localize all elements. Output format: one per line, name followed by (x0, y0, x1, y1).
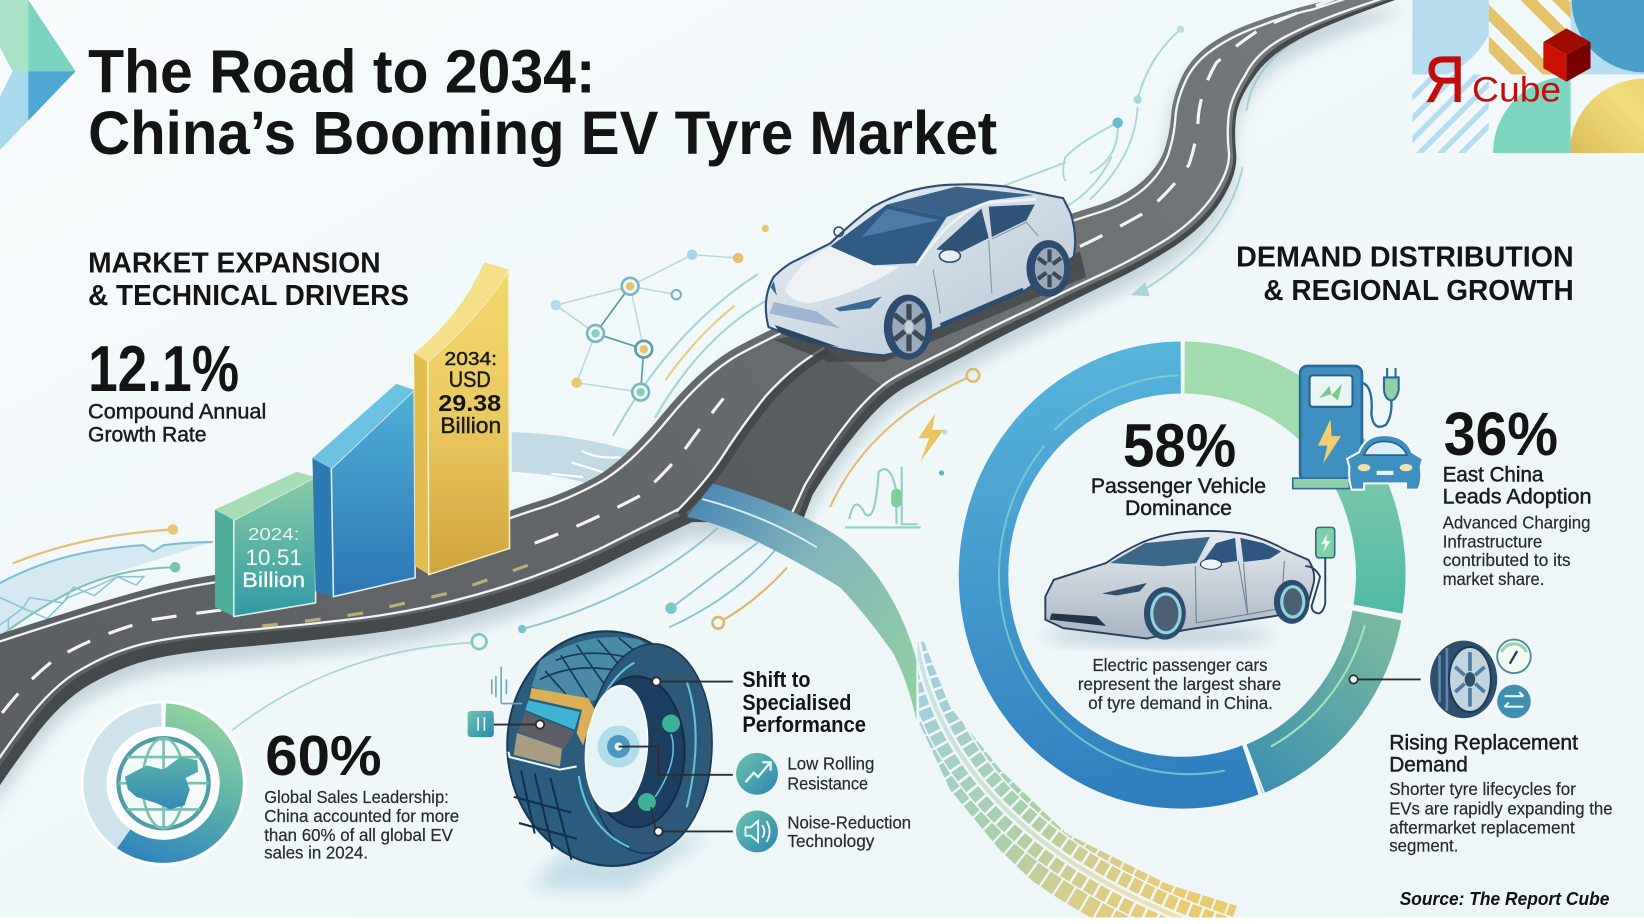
title: The Road to 2034: (88, 37, 596, 105)
feature: noise reduction technology: Noise-Reduction (787, 812, 911, 832)
icon: lightning and plug sketch (845, 413, 944, 527)
flow lines and network nodes (0, 26, 1308, 730)
pale circuit band at left (0, 542, 212, 636)
source credit: Source: The Report Cube (1400, 888, 1609, 909)
heading: demand distribution: DEMAND DISTRIBUTION (1236, 240, 1574, 272)
bar: 2034: Billion (440, 413, 501, 438)
stat: passenger vehicle dominance: Passenger Vehicle (1091, 475, 1266, 498)
text: rising replacement demand: EVs are rapidly expanding the (1389, 799, 1613, 819)
stat: east china: contributed to its (1443, 550, 1571, 570)
stat: 60 percent: 60% (265, 724, 382, 787)
bar: 2024: Billion (242, 569, 305, 592)
darker lane beside main carriageway (687, 351, 886, 519)
headlights and grilles (835, 297, 882, 311)
label: shift to specialised performance (742, 667, 866, 737)
text: rising replacement demand: Demand (1389, 754, 1468, 777)
tyre callout leaders (494, 677, 733, 836)
heading: demand distribution (1236, 240, 1574, 306)
corner chevron decoration (0, 0, 75, 150)
stat: 60 percent (264, 724, 459, 863)
bar chart: market size 2024 to 2034 (215, 262, 510, 617)
decorative tyre track (914, 629, 1227, 924)
stat: east china: Infrastructure (1443, 531, 1542, 551)
pale ribbon loop behind road (512, 432, 648, 516)
stat: 60 percent: China accounted for more (264, 806, 459, 826)
bar: 2024: 2024: (248, 524, 299, 544)
heading: market expansion (88, 247, 409, 311)
feature: low rolling resistance: Resistance (787, 774, 868, 794)
logo (1412, 0, 1644, 154)
bar: 2034: 2034: (445, 348, 497, 369)
heading: market expansion: & TECHNICAL DRIVERS (88, 279, 409, 311)
stat: CAGR: 12.1% (88, 332, 239, 405)
stat: 60 percent: Global Sales Leadership: (264, 787, 449, 807)
label: shift to specialised performance: Performance (742, 712, 866, 737)
stat: east china (1443, 400, 1592, 589)
text: rising replacement demand: Rising Replacement (1389, 732, 1578, 755)
stat: passenger vehicle dominance (1091, 412, 1266, 520)
text: rising replacement demand: Shorter tyre lifecycles for (1389, 779, 1576, 799)
label: shift to specialised performance: Shift to (742, 667, 810, 692)
icon: wallbox charger (1305, 527, 1335, 613)
bar: 2034: 29.38 (438, 390, 501, 416)
stat: east china: 36% (1444, 400, 1558, 468)
label: shift to specialised performance: Specialised (742, 690, 851, 715)
icon: tyre cutaway (468, 621, 733, 891)
bar: 2024 (215, 472, 316, 617)
hood panel (785, 246, 900, 303)
stat: CAGR (88, 332, 266, 446)
icon: blue car front (1348, 436, 1422, 489)
text: passenger cars note (1078, 655, 1281, 713)
stat: east china: Leads Adoption (1443, 485, 1592, 508)
segment: teal (1335, 441, 1381, 609)
title (88, 37, 997, 167)
icon: charging pump with blue car (1293, 366, 1422, 489)
bar: 2034: USD (449, 367, 491, 392)
text: rising replacement demand (1389, 732, 1613, 855)
heading: market expansion: MARKET EXPANSION (88, 247, 381, 279)
text: passenger cars note: Electric passenger cars (1093, 655, 1268, 675)
icon: silver passenger car with charger (1043, 527, 1335, 645)
donut: global sales (81, 700, 246, 866)
feature: noise reduction technology (736, 810, 911, 852)
logo: Cube (1472, 70, 1561, 110)
stat: east china: Advanced Charging (1443, 512, 1591, 532)
feature: low rolling resistance: Low Rolling (787, 754, 874, 774)
segment: east china (1185, 368, 1335, 441)
stat: CAGR: Compound Annual (88, 400, 266, 423)
icon: noise chip (468, 667, 522, 737)
roof and windscreen (887, 187, 1034, 217)
donut: demand distribution (984, 368, 1400, 798)
bar: 2024: 10.51 (245, 545, 302, 570)
bar: midpoint (312, 384, 415, 597)
icon: globe with China (118, 738, 209, 828)
text: passenger cars note: represent the largest share (1078, 674, 1281, 694)
side windows (936, 209, 989, 252)
blue-green ribbon crossing road (687, 483, 916, 720)
icon: replacement tyre with gauge and arrows (1349, 640, 1531, 718)
feature: low rolling resistance (736, 753, 874, 795)
logo: Я (1425, 43, 1465, 116)
segment: passenger vehicles (984, 368, 1254, 783)
bottom white strip (0, 917, 1644, 924)
stat: 60 percent: than 60% of all global EV (264, 825, 453, 845)
wheels (884, 240, 1070, 360)
car on road (766, 184, 1086, 362)
text: passenger cars note: of tyre demand in China. (1088, 693, 1273, 713)
text: rising replacement demand: aftermarket replacement (1389, 818, 1575, 838)
bar: 2034 (414, 262, 510, 575)
stat: passenger vehicle dominance: 58% (1123, 412, 1236, 480)
text: rising replacement demand: segment. (1389, 835, 1458, 855)
stat: east china: East China (1443, 463, 1544, 486)
heading: demand distribution: & REGIONAL GROWTH (1263, 274, 1574, 306)
stat: 60 percent: sales in 2024. (264, 843, 368, 863)
stat: passenger vehicle dominance: Dominance (1125, 497, 1232, 520)
segment: replacement (1256, 615, 1377, 769)
title: China’s Booming EV Tyre Market (88, 99, 997, 167)
feature: noise reduction technology: Technology (787, 831, 875, 851)
road (0, 0, 1410, 817)
stat: CAGR: Growth Rate (88, 423, 207, 446)
stat: east china: market share. (1443, 569, 1544, 589)
